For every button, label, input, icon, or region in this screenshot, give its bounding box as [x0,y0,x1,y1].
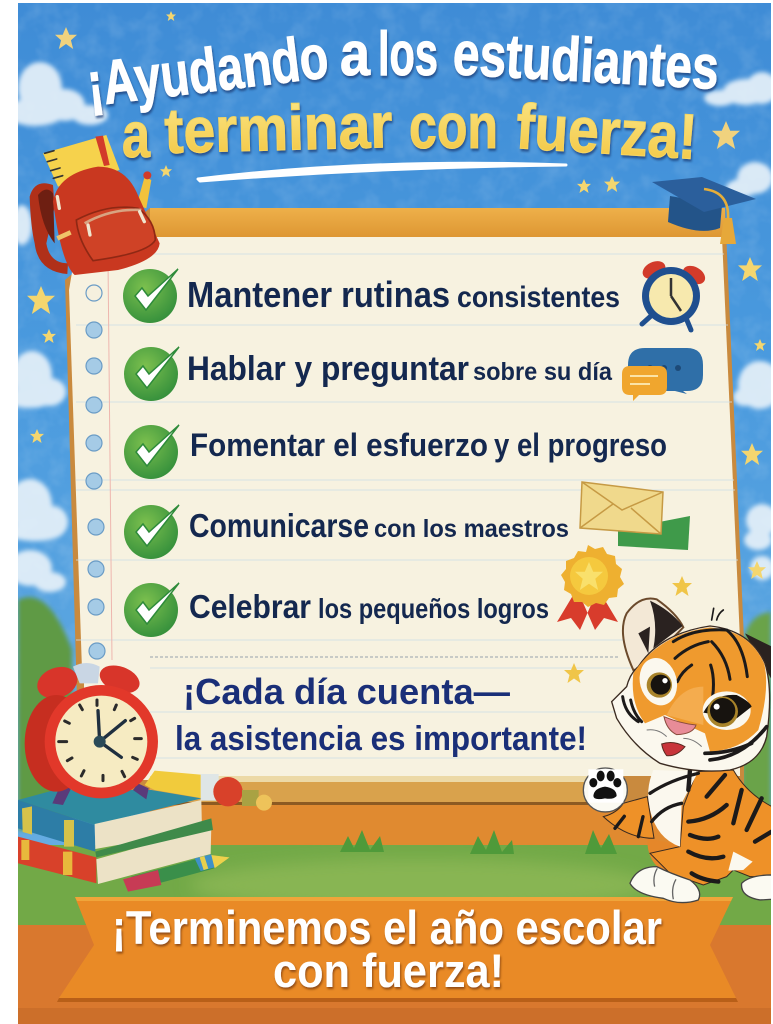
title line 2 [122,89,699,173]
head [612,626,770,771]
icon: big clock, books, pencil, crayon group [18,660,272,892]
tiger mascot [583,599,772,903]
raised arm [603,797,654,838]
callout: attendance [175,671,587,758]
top orange bar [150,208,725,238]
title line 2: a [122,99,150,171]
text: communicate: con los maestros [374,515,569,543]
body [650,770,772,885]
front paws [630,867,700,903]
stars on paper [564,576,692,683]
ruled lines [76,254,740,758]
icon: check 1 [123,269,178,323]
icon: backpack [30,135,160,275]
checklist [123,269,667,637]
icon: books [18,790,213,884]
title line 1: ¡Ayudando [83,22,332,120]
text: routines [187,274,620,315]
left ear [623,599,683,670]
icon: envelope [580,482,690,550]
chest [648,770,698,847]
item 3 [124,425,667,479]
panel: notebook board [65,208,744,805]
text: talk: sobre su día [473,358,613,386]
text: communicate: Comunicarse [189,507,369,544]
icon: big alarm clock [25,660,158,805]
icon: graduation cap [652,177,756,244]
icon: check 4 [124,505,179,559]
text: talk: Hablar y preguntar [187,350,469,388]
title line 2: terminar [163,89,393,167]
item 1 [123,269,620,323]
banner [57,897,738,1002]
callout: attendance: ¡Cada día cuenta— [183,671,510,712]
banner ribbon [59,897,736,998]
icon: award ribbon [557,545,624,630]
text: routines: Mantener rutinas [187,274,450,315]
clouds [5,62,773,592]
background trees and ground [18,597,771,1024]
paper sheet [69,237,740,776]
title line 1: a [340,20,370,89]
icon: crayon [123,854,230,892]
board frame [65,208,744,805]
banner text: ¡Terminemos el año escolar [112,901,662,954]
text: effort: Fomentar el esfuerzo [190,427,488,463]
icon: check 2 [124,347,179,401]
callout: attendance: la asistencia es importante! [175,720,587,758]
wood base [150,776,620,782]
banner: con fuerza! [273,944,504,997]
binder holes [86,285,105,659]
item 2 [124,347,613,401]
title underline [198,163,566,181]
text: effort [190,427,667,463]
icon: check 3 [124,425,179,479]
icon: small alarm clock [640,258,708,330]
eyes [634,654,752,730]
icon: check 5 [124,583,179,637]
text: routines: consistentes [457,281,620,314]
text: celebrate [189,588,549,625]
paw with print [583,768,627,812]
text: effort: y el progreso [494,427,667,463]
belly [728,852,753,871]
text: communicate [189,507,569,544]
title line 1: los [378,20,438,89]
title line 1 [83,19,721,120]
title line 2: fuerza! [514,90,699,173]
stars [27,11,766,579]
text: celebrate: Celebrar [189,588,311,625]
head orange fur [633,627,766,752]
text: celebrate: los pequeños logros [318,593,549,624]
title [83,19,721,181]
icon: chat bubbles [622,348,703,401]
title line 2: con [409,90,498,162]
item 4 [124,505,569,559]
right ear [745,633,772,680]
icon: pencil [145,771,272,811]
hind leg shading [647,838,685,877]
forehead stripes [623,608,767,760]
nose and mouth [664,717,696,735]
stripes [615,770,772,882]
item 5 [124,583,549,637]
